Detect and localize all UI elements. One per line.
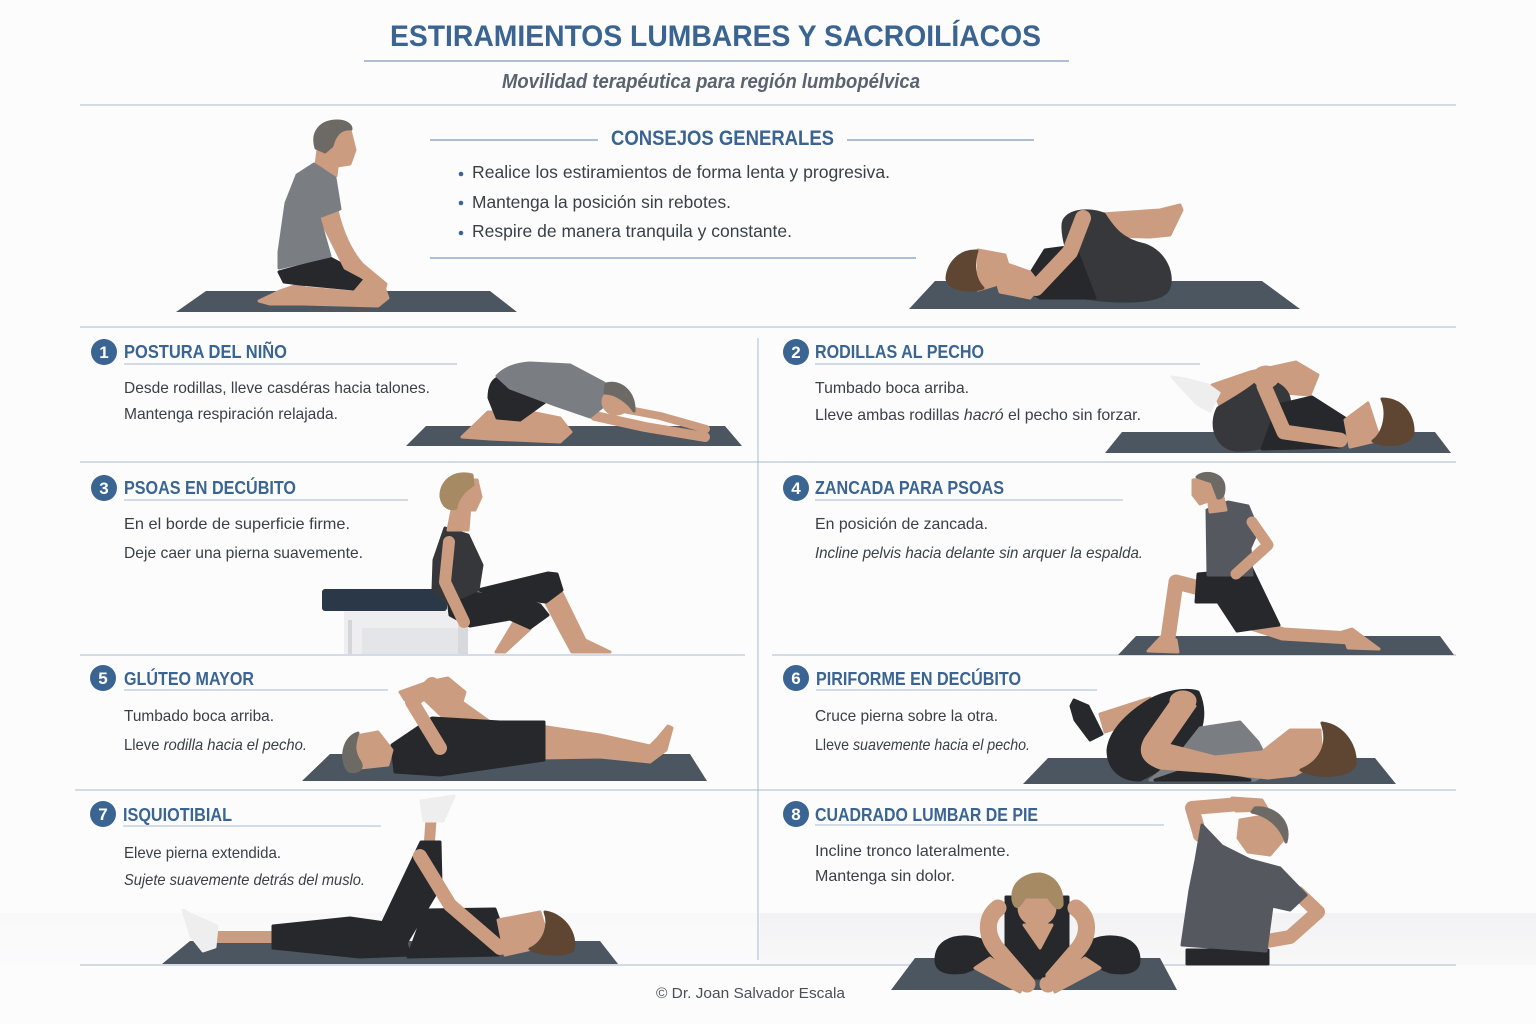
- text 3: Deje caer una pierna suavemente.: [124, 545, 363, 562]
- text 1: Desde rodillas, lleve casdéras hacia talones.: [124, 380, 430, 397]
- heading: consejos generales: CONSEJOS GENERALES: [611, 127, 834, 150]
- text 8: Mantenga sin dolor.: [815, 868, 955, 885]
- exercise 4: lunge: [783, 473, 1454, 655]
- heading 5: GLÚTEO MAYOR: [124, 668, 254, 689]
- number badge 2: [783, 339, 809, 365]
- text 6: [815, 708, 1030, 754]
- text 8: Incline tronco lateralmente.: [815, 843, 1010, 860]
- heading 3: PSOAS EN DECÚBITO: [124, 477, 296, 498]
- figure: woman seated on bench: [322, 474, 610, 654]
- text 6: Cruce pierna sobre la otra.: [815, 708, 998, 725]
- number badge 3: 3: [99, 479, 109, 498]
- figure: man knee to chest: [302, 678, 707, 781]
- title: ESTIRAMIENTOS LUMBARES Y SACROILÍACOS: [390, 19, 1041, 53]
- heading 7: ISQUIOTIBIAL: [123, 805, 232, 825]
- exercise 8: quadratus lumborum: [783, 798, 1318, 992]
- figure: woman lying knees to chest, top: [909, 205, 1300, 309]
- text 2: Lleve ambas rodillas hacró el pecho sin forzar.: [815, 407, 1141, 424]
- heading 1: POSTURA DEL NIÑO: [124, 341, 287, 362]
- exercise 1: child's pose: [91, 339, 742, 446]
- text 8: [815, 843, 1010, 885]
- text 3: [124, 516, 363, 562]
- number badge 5: [90, 665, 116, 691]
- text 5: Tumbado boca arriba.: [124, 708, 274, 725]
- exercise 2: knees to chest: [783, 339, 1451, 453]
- advice list: Realice los estiramientos de forma lenta y progresiva.: [472, 162, 890, 182]
- figure: child's pose: [406, 363, 742, 446]
- footer credit: © Dr. Joan Salvador Escala: [656, 985, 846, 1002]
- advice list: Mantenga la posición sin rebotes.: [472, 192, 731, 212]
- text 1: [124, 380, 430, 423]
- number badge 8: [783, 801, 809, 827]
- heading 2: RODILLAS AL PECHO: [815, 342, 984, 362]
- figure: woman piriformis stretch: [1023, 690, 1396, 784]
- exercise 5: gluteus: [90, 665, 707, 781]
- exercise 6: piriformis: [783, 665, 1396, 784]
- number badge 1: [91, 339, 117, 365]
- text 6: Lleve suavemente hacia el pecho.: [815, 737, 1030, 754]
- heading 8: CUADRADO LUMBAR DE PIE: [815, 805, 1038, 825]
- text 2: [815, 380, 1141, 424]
- text 2: Tumbado boca arriba.: [815, 380, 969, 397]
- number badge 4: 4: [791, 479, 801, 498]
- number badge 8: 8: [791, 805, 801, 824]
- heading 6: PIRIFORME EN DECÚBITO: [816, 668, 1021, 689]
- advice list: [459, 162, 890, 241]
- heading 4: ZANCADA PARA PSOAS: [815, 478, 1004, 498]
- figure: man kneeling on mat: [176, 121, 517, 312]
- number badge 2: 2: [791, 343, 801, 362]
- text 5: [124, 708, 307, 754]
- number badge 7: [90, 801, 116, 827]
- text 4: En posición de zancada.: [815, 516, 988, 533]
- number badge 6: 6: [791, 669, 801, 688]
- text 7: [124, 845, 365, 889]
- figure: man in lunge: [1118, 473, 1454, 655]
- figure: woman knees to chest: [1105, 362, 1451, 453]
- number badge 5: 5: [98, 669, 108, 688]
- exercise 3: psoas: [91, 474, 610, 654]
- text 4: [815, 516, 1143, 562]
- text 5: Lleve rodilla hacia el pecho.: [124, 737, 307, 754]
- number badge 1: 1: [99, 343, 109, 362]
- text 4: Incline pelvis hacia delante sin arquer la espalda.: [815, 545, 1143, 562]
- figure: man standing side bend: [1182, 798, 1318, 964]
- text 3: En el borde de superficie firme.: [124, 516, 350, 533]
- figure: woman lifting straight leg: [162, 796, 618, 964]
- advice list: Respire de manera tranquila y constante.: [472, 221, 792, 241]
- text 1: Mantenga respiración relajada.: [124, 406, 338, 423]
- text 7: Eleve pierna extendida.: [124, 845, 281, 862]
- exercise 7: hamstring: [90, 796, 618, 964]
- number badge 3: [91, 475, 117, 501]
- number badge 6: [783, 665, 809, 691]
- text 7: Sujete suavemente detrás del muslo.: [124, 872, 365, 889]
- panel: general advice: [430, 127, 1034, 258]
- number badge 7: 7: [98, 805, 108, 824]
- figure: woman seated butterfly stretch: [891, 874, 1177, 992]
- number badge 4: [783, 475, 809, 501]
- subtitle: Movilidad terapéutica para región lumbopélvica: [502, 71, 920, 93]
